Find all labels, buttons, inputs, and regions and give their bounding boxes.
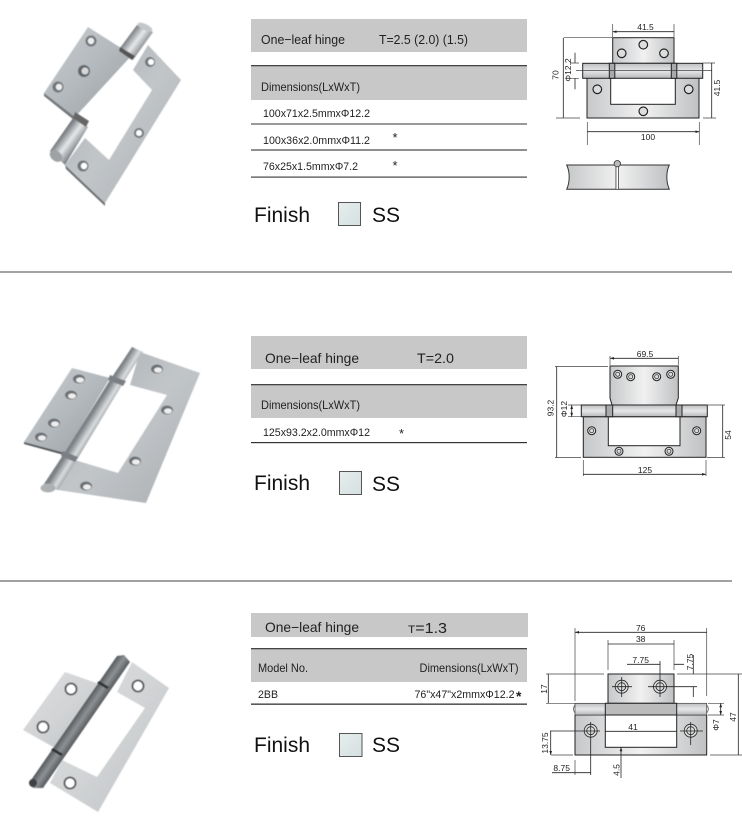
hinge type: One−leaf hinge (265, 619, 359, 635)
table column heading: Dimensions(LxWxT) (261, 398, 360, 412)
finish swatch (340, 734, 362, 756)
finish label: Finish (254, 472, 310, 495)
finish swatch (338, 202, 360, 226)
row 1: 100x71x2.5mmxΦ12.2 (263, 108, 370, 120)
drawing: hinge 3 dimensions: 7.75 (632, 655, 649, 665)
drawing: hinge 3 dimensions: 17 (539, 684, 549, 694)
table column heading: Dimensions(LxWxT) (261, 80, 360, 94)
drawing: hinge 1 dimensions (550, 22, 722, 189)
table header band (251, 384, 527, 418)
drawing: hinge 3 dimensions: 76 (636, 623, 646, 633)
table header band (251, 648, 527, 682)
thickness: T=1.3 (408, 620, 447, 637)
drawing: hinge 2 dimensions: 93.2 (546, 399, 556, 416)
finish label: Finish (254, 734, 310, 757)
drawing: hinge 1 dimensions: 41.5 (712, 79, 722, 96)
header band (251, 19, 527, 52)
drawing: hinge 3 dimensions: 41 (628, 722, 638, 732)
finish value: SS (372, 473, 400, 496)
drawing: hinge 3 dimensions: 4.5 (612, 764, 622, 776)
drawing: hinge 2 dimensions: 69.5 (637, 349, 654, 359)
hinge type: One−leaf hinge (265, 350, 359, 366)
drawing: hinge 3 dimensions (539, 623, 742, 778)
table header band (251, 65, 527, 100)
asterisk: * (516, 688, 522, 704)
header band (251, 336, 527, 369)
drawing: hinge 2 dimensions: 125 (638, 465, 652, 475)
panel: hinge 3 (23, 613, 742, 812)
row 1: 125x93.2x2.0mmxΦ12 (263, 427, 370, 439)
asterisk: * (392, 158, 398, 173)
drawing: hinge 1 dimensions: 70 (550, 70, 560, 80)
asterisk: * (399, 426, 404, 441)
header band (251, 613, 528, 637)
drawing: hinge 3 dimensions: Φ7 (711, 719, 721, 731)
panel: hinge 2 (24, 336, 733, 503)
finish swatch (340, 472, 362, 494)
finish value: SS (372, 734, 400, 757)
thickness: T=2.0 (417, 350, 454, 366)
drawing: hinge 2 dimensions: Φ12 (559, 401, 569, 417)
thickness: T=2.5 (2.0) (1.5) (379, 32, 468, 47)
row 2: 100x36x2.0mmxΦ11.2 (263, 135, 370, 147)
photo: hinge 1 (44, 21, 181, 206)
photo: hinge 3 (23, 655, 169, 812)
hinge type: One−leaf hinge (261, 32, 345, 47)
model column heading: Model No. (258, 661, 308, 675)
drawing: hinge 3 dimensions: 7.75 (685, 653, 695, 670)
asterisk: * (392, 130, 398, 145)
drawing: hinge 2 dimensions (546, 349, 733, 476)
panel: hinge 1 (44, 19, 722, 227)
drawing: hinge 1 dimensions: 41.5 (637, 22, 654, 32)
row 3: 76x25x1.5mmxΦ7.2 (263, 161, 358, 173)
finish value: SS (372, 204, 400, 227)
drawing: hinge 3 dimensions: 47 (728, 712, 738, 722)
finish label: Finish (254, 204, 310, 227)
drawing: hinge 2 dimensions: 54 (723, 430, 733, 440)
photo: hinge 2 (24, 347, 200, 503)
drawing: hinge 1 dimensions: 100 (641, 132, 655, 142)
row: dimensions: 76"x47"x2mmxΦ12.2 (414, 689, 514, 701)
drawing: hinge 3 dimensions: 38 (636, 634, 646, 644)
drawing: hinge 3 dimensions: 13.75 (540, 732, 550, 754)
dimensions column heading: Dimensions(LxWxT) (420, 661, 518, 675)
drawing: hinge 1 dimensions: Φ12.2 (563, 58, 573, 82)
row: model: 2BB (258, 689, 278, 701)
drawing: hinge 3 dimensions: 8.75 (553, 763, 570, 773)
